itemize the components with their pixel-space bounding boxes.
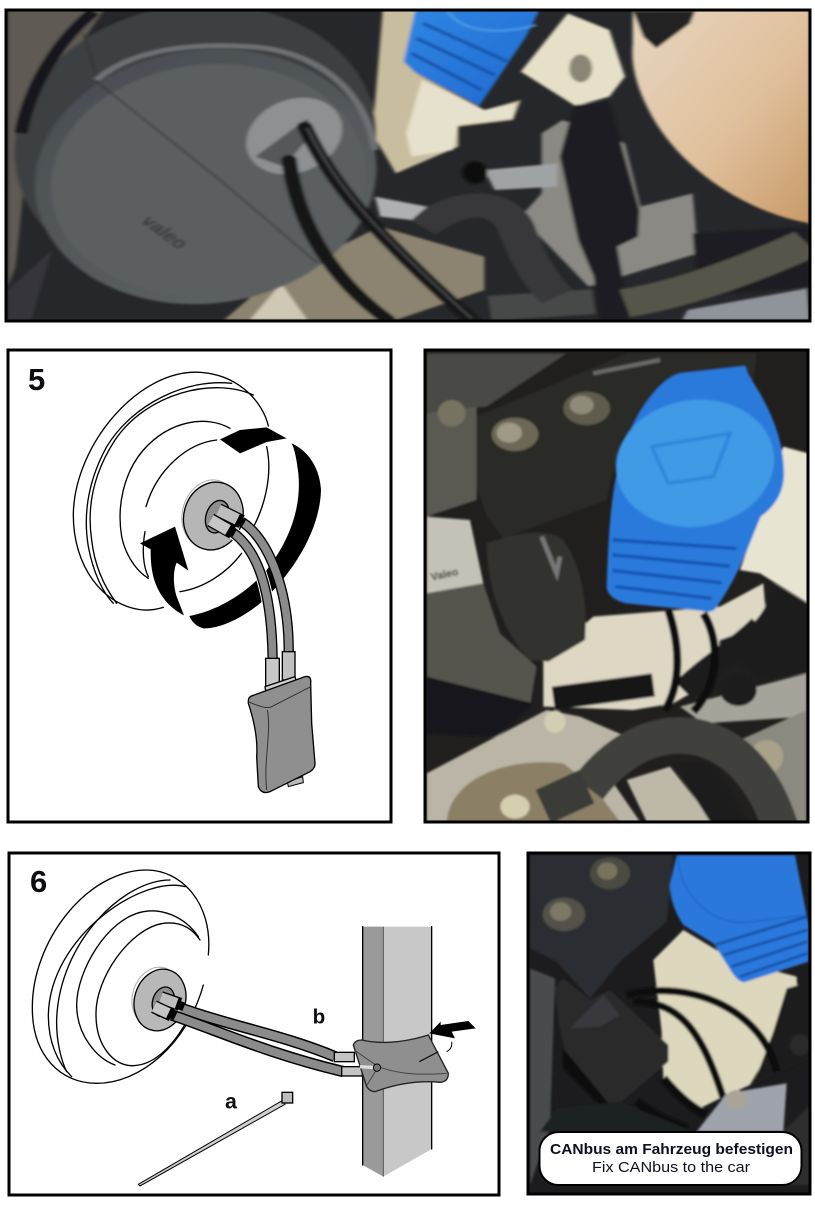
blue washer cap bbox=[607, 366, 784, 612]
step number 5: 5 bbox=[28, 362, 45, 397]
cover label and module body: Valeo bbox=[430, 566, 460, 584]
black pointer arrow bbox=[429, 1021, 476, 1038]
grommet bbox=[125, 961, 194, 1038]
bolt and bracket detail bbox=[569, 54, 592, 82]
blue washer cap bbox=[670, 855, 809, 982]
cables bbox=[627, 991, 777, 1128]
left dark strip bbox=[530, 968, 555, 1185]
cable tie bbox=[138, 1092, 293, 1186]
panel: top photo of the headlight cover with two cables bbox=[0, 0, 810, 325]
step number 6: 6 bbox=[30, 864, 47, 899]
headlight cover disc: valeo bbox=[135, 214, 193, 252]
cream reservoir bbox=[653, 930, 800, 1112]
line drawing: cover being rotated bbox=[73, 372, 321, 793]
CANbus module strapped to post bbox=[334, 1035, 452, 1092]
rotation arrow: upper tail bbox=[220, 427, 287, 453]
upper left metal bracket bbox=[427, 353, 757, 538]
bracket bolts bbox=[543, 857, 630, 931]
post bbox=[363, 927, 432, 1177]
corrugated hoses bbox=[553, 627, 760, 698]
line drawing: cover, cable, module on post bbox=[32, 870, 476, 1186]
panel: step 5 illustration bbox=[8, 350, 391, 822]
panel: step 6 photo with caption bbox=[528, 853, 810, 1194]
cover label and module body bbox=[427, 517, 537, 737]
rotation arrow: left head bbox=[140, 527, 188, 615]
label b: b bbox=[313, 1006, 325, 1029]
caption: English: Fix CANbus to the car bbox=[592, 1159, 750, 1176]
dark rubber hose bbox=[543, 735, 780, 827]
top photo frame bbox=[6, 10, 810, 321]
label a: a bbox=[225, 1089, 237, 1113]
two black cables from the cover bbox=[289, 127, 471, 320]
black cables bbox=[665, 610, 715, 712]
black connector block bbox=[560, 102, 640, 320]
headlight cover disc bbox=[12, 12, 380, 306]
cables bbox=[154, 998, 343, 1072]
panel: step 6 illustration bbox=[9, 853, 499, 1195]
white reservoir and wall bbox=[543, 447, 808, 710]
step 6 photo frame bbox=[528, 853, 810, 1194]
black round tool hub bbox=[720, 685, 758, 708]
silver strut plate bbox=[427, 710, 640, 822]
mounting bolts bbox=[438, 392, 610, 451]
cover outline bbox=[32, 870, 209, 1083]
photo background: engine parts bbox=[8, 10, 810, 320]
rotation arrow: right band bbox=[189, 443, 321, 628]
ribbed hose right bbox=[753, 984, 802, 1084]
grommet bbox=[173, 473, 252, 558]
step 5 photo frame bbox=[425, 350, 808, 822]
silver pipe area bbox=[680, 673, 807, 723]
metal bracket bbox=[530, 855, 673, 998]
blue washer cap bbox=[404, 11, 539, 106]
caption: German: CANbus am Fahrzeug befestigen bbox=[550, 1141, 793, 1158]
black CANbus module bbox=[555, 978, 668, 1105]
black round cover bbox=[487, 533, 586, 662]
cables bbox=[211, 510, 289, 660]
cover outline bbox=[73, 372, 269, 610]
panel: step 5 photo of the fitted cover under the blue cap bbox=[425, 350, 808, 827]
caption box bbox=[540, 1132, 802, 1185]
CANbus module bbox=[248, 652, 315, 793]
silver plate with bolt bbox=[697, 1083, 787, 1132]
green hoses bbox=[422, 161, 807, 308]
